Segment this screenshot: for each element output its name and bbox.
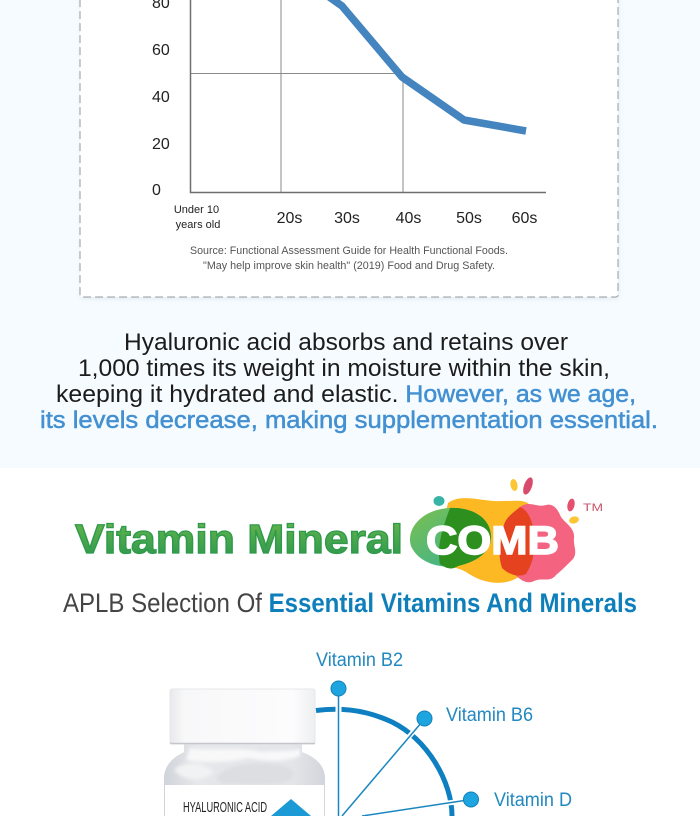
x axis labels [277, 210, 537, 227]
bottle label text: HYALURONIC ACID [183, 799, 267, 816]
logo yellow blob [436, 498, 534, 583]
text block: hyaluronic acid explanation: its levels decrease, making supplementation essential. [40, 407, 658, 434]
bottle body glass [164, 743, 325, 816]
text block: hyaluronic acid explanation: Hyaluronic acid absorbs and retains over [124, 329, 568, 356]
text block: hyaluronic acid explanation [40, 329, 658, 434]
label: Vitamin B2: Vitamin B2 [316, 650, 403, 671]
y axis labels: 0 [152, 182, 161, 199]
product: hyaluronic acid bottle [164, 689, 325, 816]
x axis labels: 20s [277, 210, 302, 227]
trademark mark: TM [583, 502, 603, 514]
spoke and node: Vitamin D [362, 792, 478, 816]
logo red overlap [500, 507, 535, 576]
logo: Vitamin Mineral COMB [75, 476, 603, 583]
diagram: nutrient wheel [316, 650, 572, 816]
chart gridlines and axes [190, 0, 546, 192]
x axis labels: 40s [396, 210, 421, 227]
x axis labels: 30s [334, 210, 360, 227]
chart line: decline with age [325, 0, 526, 131]
spoke and node: Vitamin B6 [342, 711, 432, 816]
logo green speech bubble [410, 508, 491, 567]
x axis label: under 10 years old [174, 204, 220, 231]
logo wordmark: Vitamin Mineral [75, 516, 403, 562]
y axis labels: 40 [152, 89, 170, 106]
logo COMB lettering: COMB [426, 519, 559, 563]
x axis labels: 60s [512, 210, 537, 227]
bottle cap [170, 689, 315, 744]
background: pale blue section [0, 0, 700, 468]
bottle label triangle emblem [271, 799, 311, 816]
chart source note: "May help improve skin health" (2019) Food and Drug Safety. [203, 260, 495, 272]
chart source note [190, 245, 508, 272]
y axis labels: 60 [152, 42, 170, 59]
bottle contents highlights [174, 748, 300, 784]
label: Vitamin B6: Vitamin B6 [446, 705, 533, 726]
panel: hyaluronic acid chart card [80, 0, 619, 299]
logo confetti dots [434, 476, 580, 525]
x axis label: under 10 years old: Under 10 [174, 204, 219, 216]
x axis label: under 10 years old: years old [176, 219, 220, 231]
x axis labels: 50s [456, 210, 482, 227]
label: Vitamin D: Vitamin D [494, 790, 572, 811]
text block: hyaluronic acid explanation: 1,000 times its weight in moisture within the skin, [78, 355, 610, 382]
chart: hyaluronic acid level by age [152, 0, 546, 231]
bottle label [165, 785, 324, 816]
chart source note: Source: Functional Assessment Guide for Health Functional Foods. [190, 245, 508, 257]
logo dark green overlap [439, 508, 491, 568]
wheel arc [316, 709, 452, 816]
text block: hyaluronic acid explanation: keeping it hydrated and elastic. However, as we age, [56, 381, 636, 408]
y axis labels: 20 [152, 136, 170, 153]
spoke and node: Vitamin B2 [331, 681, 346, 816]
subtitle: APLB selection: APLB Selection Of Essential Vitamins And Minerals [63, 588, 637, 618]
y axis labels [152, 0, 170, 199]
logo pink badge [500, 504, 575, 582]
